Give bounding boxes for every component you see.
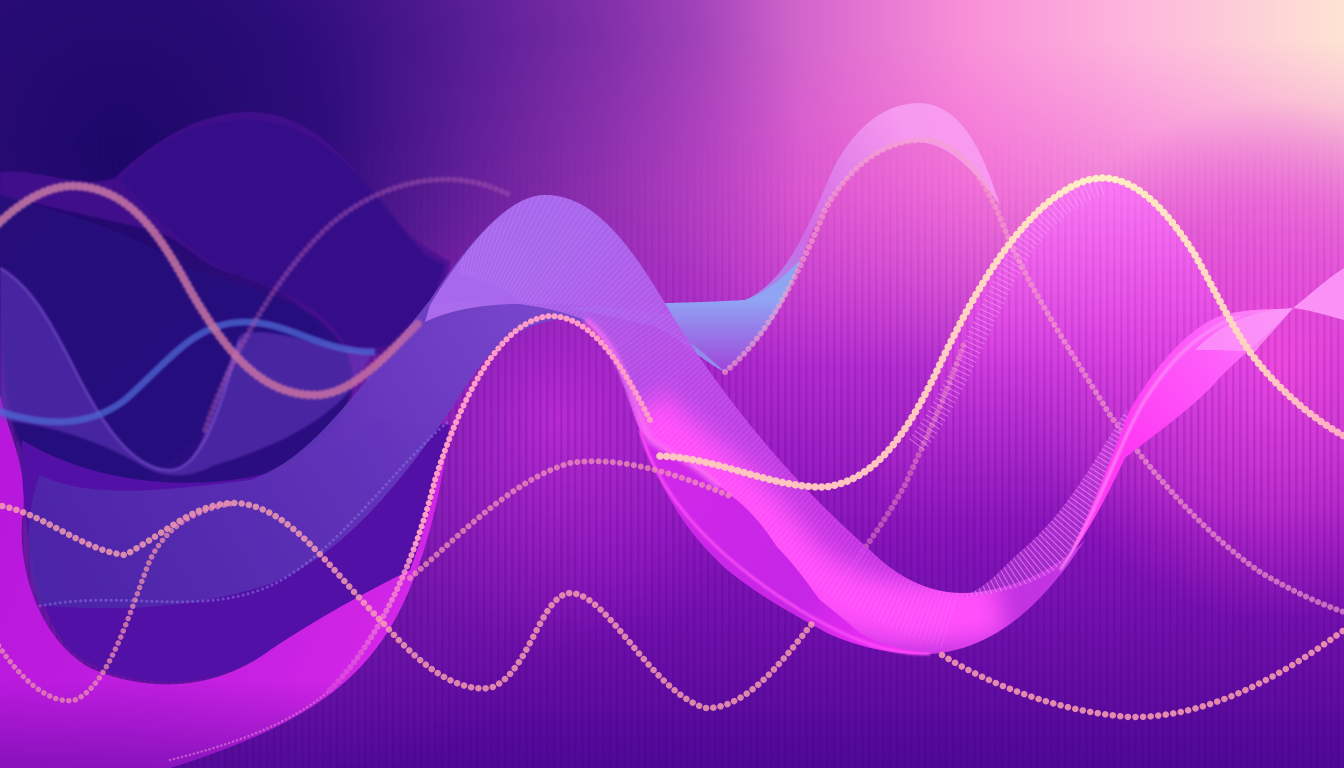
ribbon violet crest	[425, 195, 672, 322]
dotted line lower middle rising	[810, 340, 965, 620]
dotted line centre branch	[410, 461, 730, 578]
dotted line left rising	[0, 503, 235, 701]
dotted line long lower wave	[0, 503, 815, 708]
thin translucent ribbon left	[0, 268, 370, 475]
dotted line centre hump	[330, 316, 650, 690]
ribbon under fold	[640, 430, 930, 654]
dotted line upper left bright	[0, 186, 420, 395]
faint curve bottom left	[170, 690, 330, 760]
bright dotted line crest	[660, 178, 1344, 487]
periwinkle ribbon band	[29, 195, 590, 608]
blue wave line left	[0, 322, 375, 422]
right ribbon mesh	[961, 408, 1129, 597]
right mesh ribbon crest hatch	[917, 185, 1105, 445]
faint dotted line lower ribbon edge	[40, 420, 450, 606]
faint dotted line upper left	[205, 179, 510, 430]
ribbon bright edges	[640, 430, 930, 654]
main mesh ribbon	[425, 190, 1105, 660]
right ribbon fill	[1060, 268, 1344, 570]
dotted line lower right	[942, 630, 1344, 717]
top centre ribbon with blue band	[570, 103, 1000, 372]
dotted line top centre arc	[725, 140, 1344, 612]
right rising ribbon	[950, 268, 1344, 605]
magenta sweep lower left	[0, 395, 450, 768]
ribbon mesh silhouette	[425, 190, 1105, 660]
dark blobs upper left	[0, 112, 450, 494]
